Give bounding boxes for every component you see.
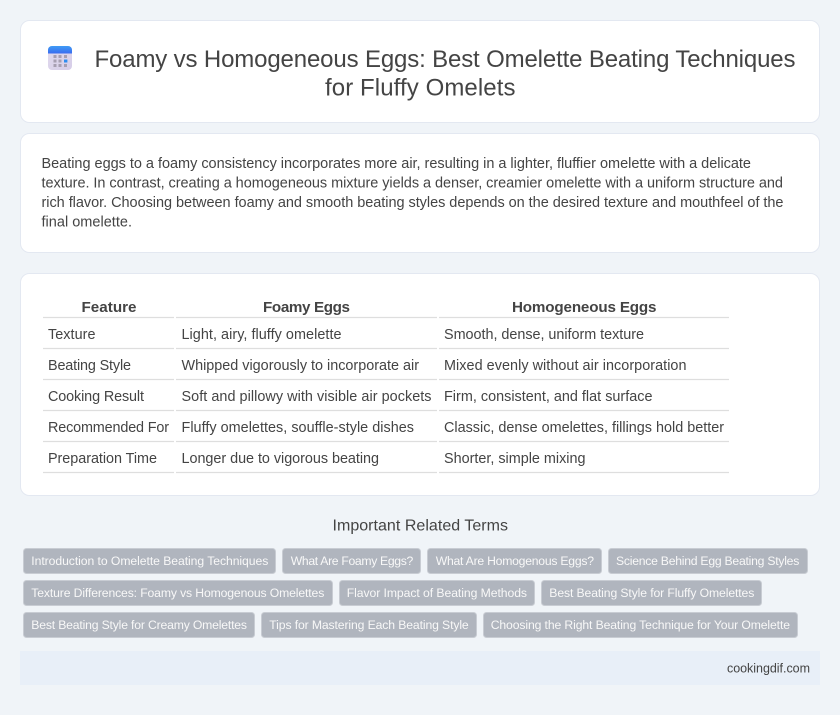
footer xyxy=(20,651,820,685)
tag: creamy omelettes: Best Beating Style for Creamy Omelettes xyxy=(31,618,247,632)
table header row: Homogeneous Eggs xyxy=(512,299,656,316)
text block: introduction: final omelette. xyxy=(42,214,132,230)
icon: calendar xyxy=(48,46,72,70)
table row: beating style: Beating Style xyxy=(48,358,131,374)
table row: cooking result xyxy=(43,389,729,410)
tag: tips xyxy=(262,612,476,638)
title: Foamy vs Homogeneous Eggs: Best Omelette Beating Techniques xyxy=(94,46,796,73)
table row: texture: Smooth, dense, uniform texture xyxy=(444,327,644,343)
tag: choosing technique: Choosing the Right Beating Technique for Your Omelette xyxy=(491,618,790,632)
table header row: Foamy Eggs xyxy=(263,299,350,316)
table row: recommended for xyxy=(43,420,729,442)
title: for Fluffy Omelets xyxy=(325,74,516,102)
title xyxy=(94,46,796,102)
tag: introduction: Introduction to Omelette Beating Techniques xyxy=(31,554,268,568)
table header row: Feature xyxy=(82,299,136,316)
panel: title header xyxy=(20,20,820,122)
tag: what are foamy eggs xyxy=(282,548,420,574)
table row: preparation time: Longer due to vigorous beating xyxy=(182,451,379,467)
table row: texture: Texture xyxy=(48,327,96,343)
table row: beating style: Whipped vigorously to incorporate air xyxy=(182,358,419,374)
tag: creamy omelettes xyxy=(24,612,254,638)
text block: introduction: Beating eggs to a foamy consistency incorporates more air, resulting in a lighter, fluffier omelette with a delicate xyxy=(42,156,751,172)
table row: recommended for: Fluffy omelettes, souffle-style dishes xyxy=(182,420,414,436)
text block: introduction: rich flavor. Choosing between foamy and smooth beating styles depends on the desired texture and mouthfeel of the xyxy=(42,195,784,211)
text block: introduction xyxy=(42,156,784,230)
tag: what are homogenous eggs xyxy=(428,548,602,574)
table row: recommended for: Classic, dense omelettes, fillings hold better xyxy=(444,420,724,436)
tag: tips: Tips for Mastering Each Beating Style xyxy=(269,618,469,632)
table row: preparation time: Preparation Time xyxy=(48,451,157,467)
tag: fluffy omelettes xyxy=(542,580,762,606)
table row: recommended for: Recommended For xyxy=(48,420,169,436)
tag: flavor impact xyxy=(340,580,534,606)
tag: introduction xyxy=(24,548,276,574)
table row: texture xyxy=(43,327,729,348)
table row: cooking result: Soft and pillowy with visible air pockets xyxy=(182,389,432,405)
table row: preparation time: Shorter, simple mixing xyxy=(444,451,586,467)
table row: beating style: Mixed evenly without air incorporation xyxy=(444,358,686,374)
footer: cookingdif.com xyxy=(727,662,810,676)
tag: fluffy omelettes: Best Beating Style for Fluffy Omelettes xyxy=(549,586,754,600)
tag: what are foamy eggs: What Are Foamy Eggs? xyxy=(291,554,414,568)
table row: cooking result: Firm, consistent, and flat surface xyxy=(444,389,652,405)
tag: choosing technique xyxy=(484,612,798,638)
tag: what are homogenous eggs: What Are Homogenous Eggs? xyxy=(436,554,594,568)
table row: cooking result: Cooking Result xyxy=(48,389,144,405)
tag: science behind egg beating xyxy=(608,548,808,574)
text block: introduction: texture. In contrast, creating a homogeneous mixture yields a denser, creamier omelette with a uniform structure and xyxy=(42,176,783,192)
table header row xyxy=(43,299,729,318)
tag: texture differences: Texture Differences: Foamy vs Homogenous Omelettes xyxy=(31,586,324,600)
tag: flavor impact: Flavor Impact of Beating Methods xyxy=(347,586,527,600)
panel: introduction paragraph xyxy=(20,134,820,252)
tag: science behind egg beating: Science Behind Egg Beating Styles xyxy=(616,554,799,568)
table row: preparation time xyxy=(43,451,729,472)
heading: important related terms: Important Related Terms xyxy=(332,518,508,534)
table row: beating style xyxy=(43,358,729,380)
panel: comparison table xyxy=(20,274,820,496)
related term tags xyxy=(24,548,808,638)
tag: texture differences xyxy=(24,580,332,606)
table row: texture: Light, airy, fluffy omelette xyxy=(182,327,342,343)
